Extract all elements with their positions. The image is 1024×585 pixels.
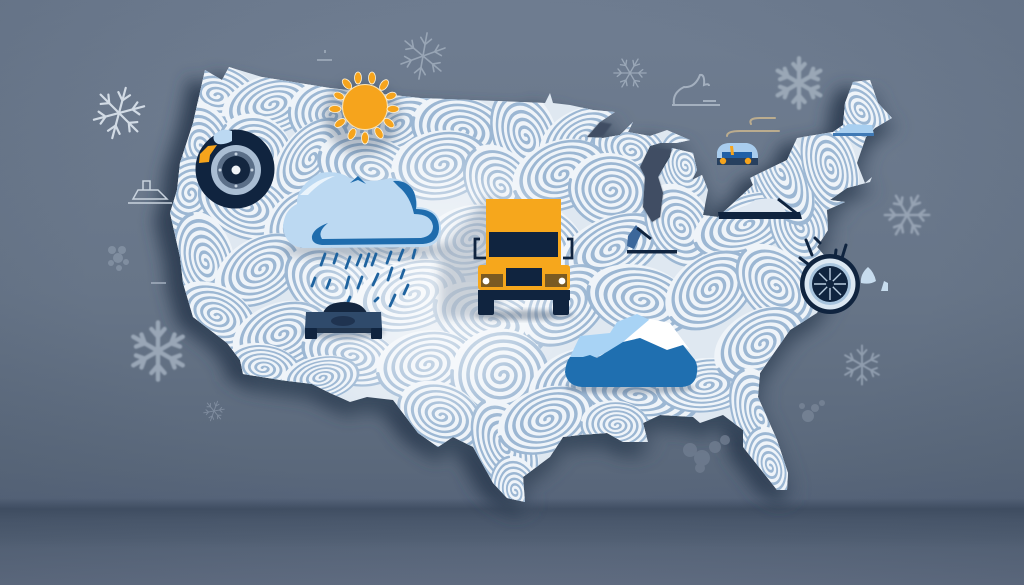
icon: snowy mountain cloud: [565, 314, 697, 394]
rain cloud: [283, 172, 441, 248]
truck mirrors: [475, 239, 572, 258]
faint icon: snowflake small: [202, 398, 226, 424]
icon: blue snow patch on Maine: [833, 124, 874, 136]
map of the United States with swirl pattern: [170, 67, 892, 502]
wind streaks: [727, 118, 779, 136]
faint icon: snowflake lower right: [845, 346, 879, 384]
faint icon: snowflake top right small: [610, 52, 650, 94]
faint icon: dotted snow patch gulf: [683, 435, 730, 473]
map drop shadow: [154, 74, 900, 517]
rain drops: [312, 250, 415, 306]
faint icon: snowflake lower left: [133, 322, 183, 380]
faint dashes: [151, 50, 332, 283]
faint icon: cloud outline top right: [672, 75, 720, 105]
icon: brake tire: [196, 130, 274, 208]
Lake Michigan and Superior dark water: [587, 122, 672, 222]
truck wheels: [478, 298, 494, 315]
truck windshield: [489, 232, 558, 257]
faint icon: dotted snow patch atlantic: [799, 400, 825, 422]
icon: sun: [324, 72, 400, 154]
faint icon: snow boat left of coast: [128, 181, 172, 203]
swirl texture: [170, 67, 892, 502]
headlights: [483, 278, 489, 284]
icon: bus on Great Lakes: [717, 143, 758, 165]
faint icon: snowflake right: [879, 186, 935, 244]
icon: car: [301, 302, 385, 339]
truck grille: [506, 268, 542, 286]
icon: east coast tire: [800, 238, 860, 314]
faint icon: snowflake top right large: [778, 58, 820, 108]
faint icon: snowflake top centre: [399, 29, 447, 83]
icon: cloud with rain: [280, 172, 450, 306]
small clouds beside tire: [861, 267, 888, 291]
icon: shovel: [627, 225, 677, 254]
faint icon: snowflake upper left: [91, 82, 147, 144]
icon: snow plow bar: [718, 198, 802, 219]
icon: truck: [440, 199, 574, 320]
faint icon: dotted snow patch left: [108, 246, 129, 271]
